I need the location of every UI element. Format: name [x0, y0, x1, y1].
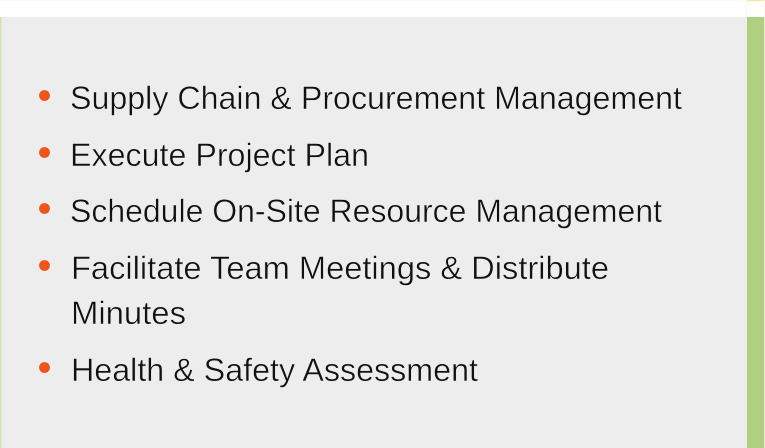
- bullet item: supply chain: Supply Chain & Procurement Management: [70, 80, 682, 116]
- bullet item: team meetings: Minutes: [71, 295, 186, 331]
- left green edge: [0, 17, 2, 448]
- bullet item: team meetings: Facilitate Team Meetings & Distribute: [71, 250, 609, 286]
- bullet item: health and safety: Health & Safety Assessment: [71, 352, 478, 388]
- bullet list: [39, 80, 682, 388]
- right bar outer edge: [764, 17, 765, 448]
- bullet item: team meetings: [39, 250, 609, 331]
- bullet item: on-site resources: Schedule On-Site Resource Management: [70, 193, 662, 229]
- right green bar: [747, 17, 764, 448]
- bullet item: project plan: Execute Project Plan: [70, 137, 369, 173]
